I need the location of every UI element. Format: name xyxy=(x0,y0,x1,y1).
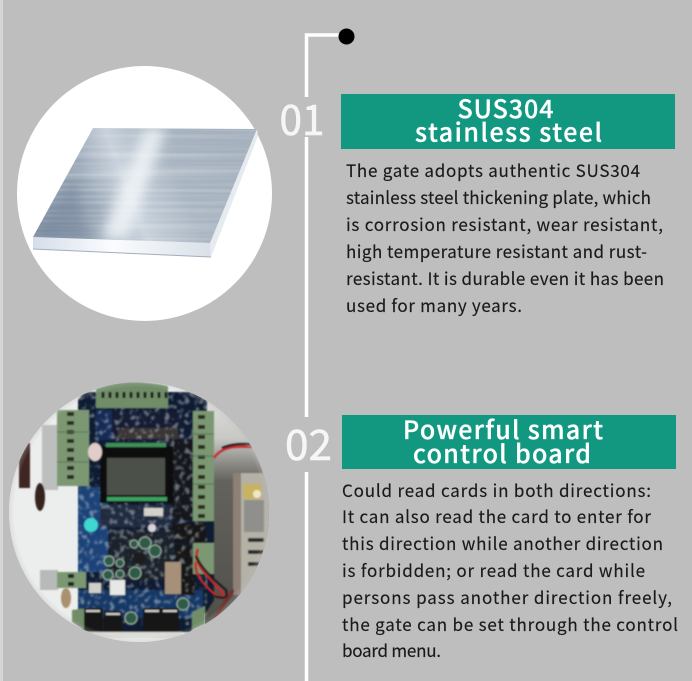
timeline connector xyxy=(305,28,354,681)
timeline start dot xyxy=(338,28,354,44)
circle edge fade xyxy=(9,382,269,642)
text block: stainless steel description: is corrosion resistant, wear resistant, xyxy=(346,211,663,236)
right terminal block xyxy=(193,411,214,521)
circuit board xyxy=(57,382,214,638)
number 02: 02 xyxy=(285,412,332,473)
heading panel: Powerful smart control board: Powerful smart xyxy=(403,411,603,447)
electrolytic capacitors xyxy=(103,537,189,624)
text block: stainless steel description: The gate adopts authentic SUS304 xyxy=(346,157,640,182)
left terminal block xyxy=(57,410,89,486)
power supply xyxy=(233,473,273,595)
panel: stainless steel photo xyxy=(17,66,272,321)
heading panel: SUS304 stainless steel: SUS304 xyxy=(458,90,554,126)
top terminal block xyxy=(96,382,168,408)
text block: control board description: is forbidden; or read the card while xyxy=(342,557,645,582)
heading panel: Powerful smart control board: control board xyxy=(413,435,591,471)
text block: stainless steel description xyxy=(346,157,664,317)
panel: control board photo xyxy=(5,380,275,645)
enclosure shadows and slots xyxy=(19,425,71,608)
number 01: 01 xyxy=(280,87,324,148)
mosfets xyxy=(84,608,103,632)
heading panel: SUS304 stainless steel xyxy=(341,90,675,150)
white capacitor xyxy=(88,443,102,461)
wires xyxy=(196,444,252,620)
text block: control board description: persons pass another direction freely, xyxy=(342,584,672,609)
text block: control board description: Could read cards in both directions: xyxy=(342,477,651,502)
heading panel: SUS304 stainless steel: stainless steel xyxy=(415,114,602,150)
heading panel: Powerful smart control board xyxy=(342,411,676,471)
text block: control board description xyxy=(342,477,678,662)
text block: control board description: It can also read the card to enter for xyxy=(342,503,651,528)
text block: stainless steel description: used for many years. xyxy=(346,292,522,317)
text block: control board description: board menu. xyxy=(342,637,441,662)
bottom corner terminals xyxy=(71,608,86,630)
lower left terminal xyxy=(57,572,86,588)
text block: stainless steel description: resistant. It is durable even it has been xyxy=(346,265,664,290)
background right of board xyxy=(205,402,269,624)
lower right terminal xyxy=(193,543,214,574)
text block: stainless steel description: stainless steel thickening plate, which xyxy=(346,184,651,209)
text block: control board description: this direction while another direction xyxy=(342,530,663,555)
icon: steel plate xyxy=(30,126,260,257)
teal indicator xyxy=(84,518,98,532)
text block: control board description: the gate can be set through the control xyxy=(342,611,678,636)
lcd display xyxy=(100,446,173,503)
text block: stainless steel description: high temperature resistant and rust- xyxy=(346,238,647,263)
